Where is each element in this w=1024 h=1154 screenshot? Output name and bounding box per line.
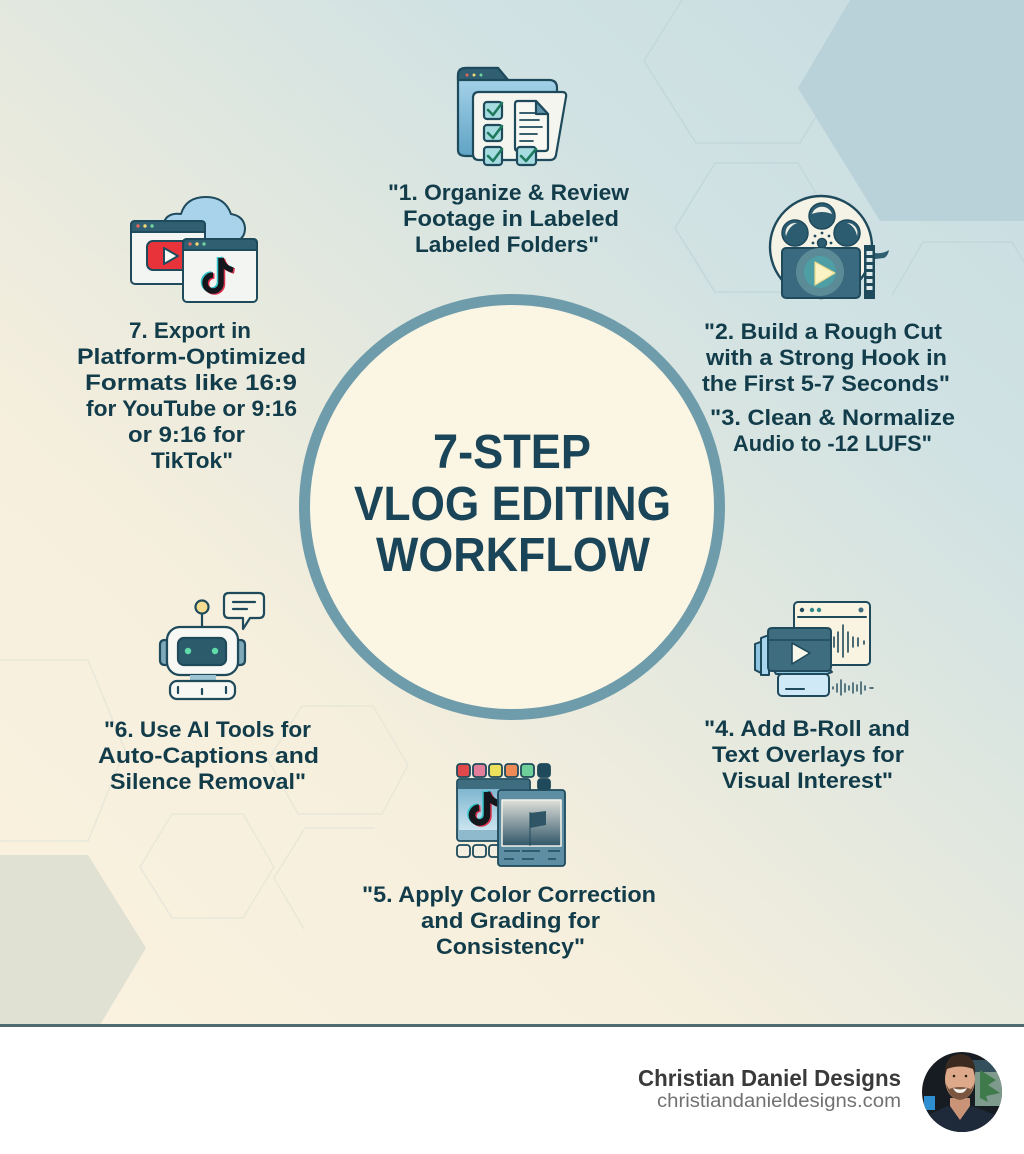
avatar portrait (922, 1052, 1002, 1132)
step 3 text: "3. Clean & Normalize (710, 405, 955, 430)
step 6 text: "6. Use AI Tools for (104, 717, 311, 742)
step 3 text (710, 405, 955, 456)
step 4 text: Visual Interest" (722, 768, 893, 793)
step 5 text (362, 882, 656, 959)
step 2 (702, 196, 950, 396)
step 5 text: and Grading for (421, 908, 600, 933)
step 2 text: the First 5-7 Seconds" (702, 371, 950, 396)
step 2 text: with a Strong Hook in (705, 345, 947, 370)
step 7 text: 7. Export in (129, 318, 251, 343)
step 4 text: Text Overlays for (712, 742, 904, 767)
title: VLOG EDITING (354, 478, 671, 531)
icon: AI robot with speech bubble (160, 593, 264, 699)
step 4 (704, 602, 910, 793)
step 6 text: Silence Removal" (110, 769, 306, 794)
icon: cloud with YouTube and TikTok windows (131, 197, 257, 302)
step 5 (362, 764, 656, 959)
step 7 text: TikTok" (151, 448, 233, 473)
step 7 (77, 197, 306, 473)
step 6 (98, 593, 319, 794)
step 1 (388, 68, 630, 257)
step 4 text (704, 716, 910, 793)
step 7 text: Platform-Optimized (77, 344, 306, 369)
step 2 text: "2. Build a Rough Cut (704, 319, 943, 344)
footer brand name: Christian Daniel Designs (638, 1065, 901, 1091)
step 7 text: Formats like 16:9 (85, 370, 297, 395)
step 7 text: for YouTube or 9:16 (86, 396, 297, 421)
step 4 text: "4. Add B-Roll and (704, 716, 910, 741)
step 5 text: Consistency" (436, 934, 585, 959)
icon: b-roll video and waveform (755, 602, 873, 696)
step 2 text (702, 319, 950, 396)
step 7 text: or 9:16 for (128, 422, 245, 447)
step 1 text: Labeled Folders" (415, 232, 599, 257)
title (354, 426, 671, 582)
step 1 text: Footage in Labeled (403, 206, 619, 231)
step 7 text (77, 318, 306, 473)
icon: film reel with play screen (770, 196, 889, 299)
footer bar (0, 1024, 1024, 1132)
icon: folder with checklist (458, 68, 566, 165)
icon: color grading windows (457, 764, 565, 866)
step 1 text: "1. Organize & Review (388, 180, 630, 205)
step 6 text (98, 717, 319, 794)
central circle with title (304, 300, 720, 714)
step 1 text (388, 180, 630, 257)
title: 7-STEP (433, 426, 591, 479)
footer website: christiandanieldesigns.com (657, 1091, 901, 1112)
step 3 text: Audio to -12 LUFS" (733, 431, 932, 456)
step 6 text: Auto-Captions and (98, 743, 319, 768)
title: WORKFLOW (376, 529, 651, 582)
step 5 text: "5. Apply Color Correction (362, 882, 656, 907)
